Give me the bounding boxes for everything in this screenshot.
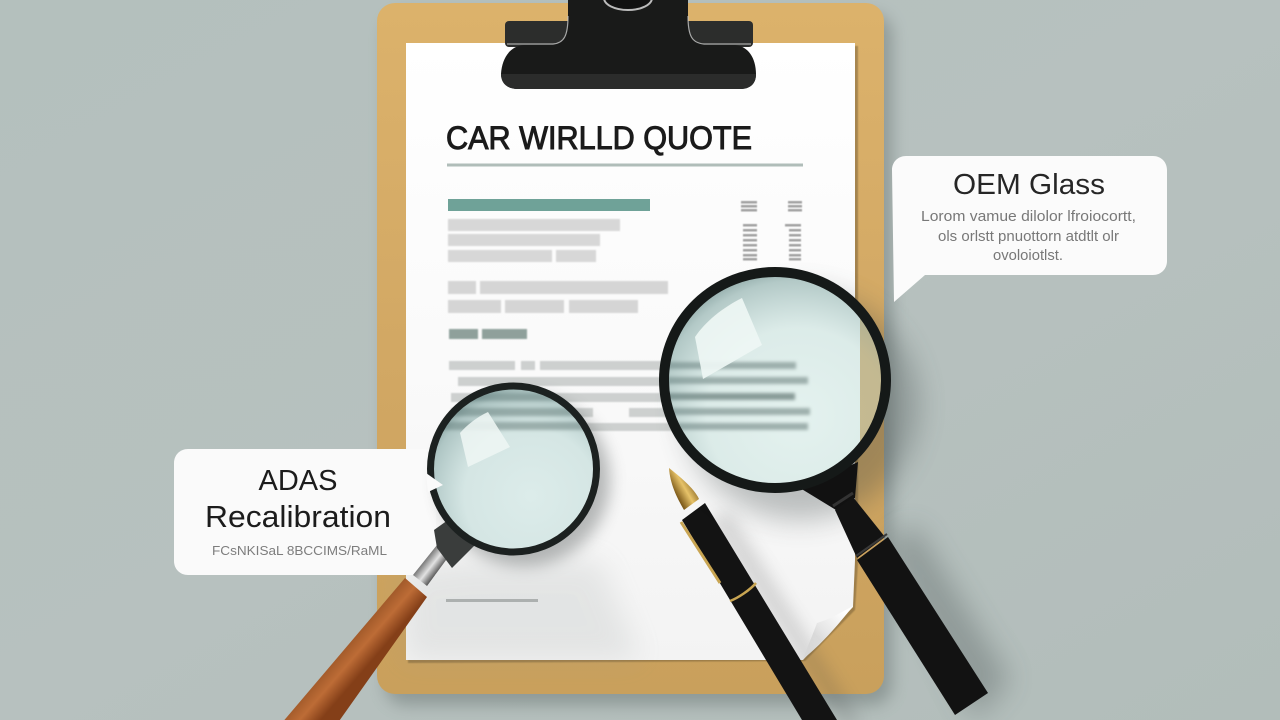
text block: quote lines xyxy=(449,361,810,431)
pen clip xyxy=(681,522,720,583)
large lens highlight xyxy=(695,298,762,379)
small lens glass xyxy=(434,390,593,548)
text block: placeholder lines 2 xyxy=(448,281,668,313)
section bar xyxy=(448,199,650,211)
large lens glass xyxy=(669,277,881,483)
pen body xyxy=(682,503,837,720)
callout body text xyxy=(921,209,1136,264)
subheading bars xyxy=(449,329,527,339)
clipboard xyxy=(377,3,892,705)
pen ring xyxy=(730,583,756,601)
callout body text: ovoloiotlst. xyxy=(993,248,1063,264)
small lens rim xyxy=(430,386,596,552)
large lens handle xyxy=(800,462,988,715)
callout heading line 2: Recalibration xyxy=(205,499,391,534)
callout caption: FCsNKISaL 8BCCIMS/RaML xyxy=(212,544,387,558)
title: CAR WIRLLD QUOTE xyxy=(446,120,752,156)
text block: placeholder lines 1 xyxy=(448,219,620,262)
title rule xyxy=(447,164,803,166)
small lens highlight xyxy=(460,412,510,467)
callout body text: ols orlstt pnuottorn atdtlt olr xyxy=(938,229,1119,245)
small magnifying glass xyxy=(281,385,610,720)
pen xyxy=(669,468,862,720)
callout pointer xyxy=(426,473,443,492)
signature line xyxy=(446,599,538,602)
paper curl xyxy=(803,606,853,659)
price columns xyxy=(741,201,802,260)
small lens handle xyxy=(281,520,478,720)
clip xyxy=(501,0,756,89)
large lens rim xyxy=(664,272,886,488)
callout heading: OEM Glass xyxy=(953,169,1105,201)
large magnifying glass xyxy=(660,270,1010,720)
paper sheet xyxy=(400,43,858,663)
callout heading: ADAS xyxy=(259,465,337,497)
pen nib xyxy=(669,468,699,510)
callout body text: Lorom vamue dilolor lfroiocortt, xyxy=(921,209,1136,225)
callout: OEM Glass xyxy=(892,156,1167,302)
callout: ADAS Recalibration xyxy=(174,449,436,575)
